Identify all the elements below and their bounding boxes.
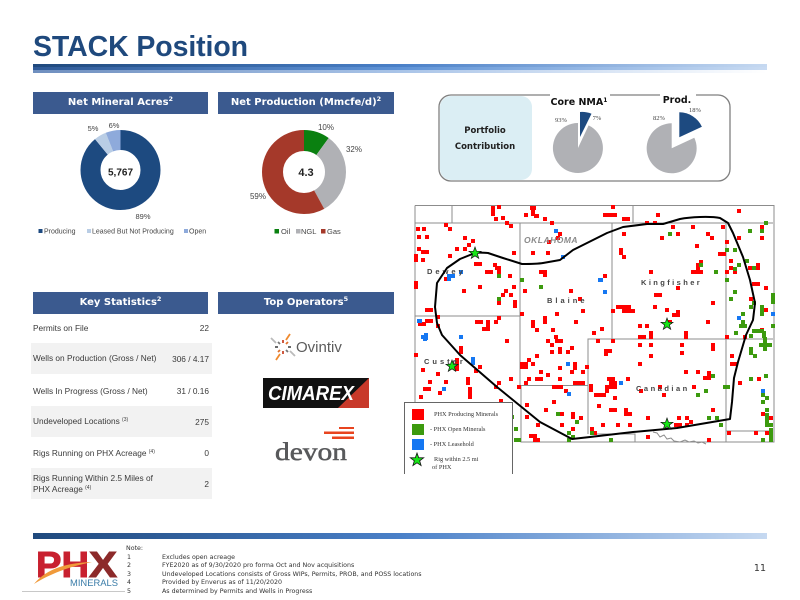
legend: net mineral acres: Open bbox=[189, 229, 206, 236]
page number: 11 bbox=[754, 563, 766, 574]
row: rigs within 2.5 miles: PHX Acreage (4) bbox=[33, 484, 91, 494]
map legend bbox=[404, 402, 513, 474]
map legend: - PHX Open Minerals bbox=[430, 426, 486, 433]
table: key statistics bbox=[31, 322, 212, 499]
map legend: of PHX bbox=[432, 464, 452, 471]
donut chart: net production: 59% bbox=[250, 192, 266, 201]
footnotes bbox=[126, 545, 422, 595]
row: permits on file bbox=[33, 322, 209, 333]
donut chart: net production: 4.3 bbox=[298, 167, 314, 179]
footnotes: 2 bbox=[127, 562, 131, 569]
footnotes: 3 bbox=[127, 571, 131, 578]
logo: Cimarex: CIMAREX bbox=[268, 383, 356, 405]
footnotes: 1 bbox=[127, 554, 131, 561]
row: wells in progress bbox=[33, 386, 209, 396]
county and state labels: OKLAHOMA bbox=[524, 235, 578, 245]
row: rigs within 2.5 miles bbox=[31, 468, 212, 499]
footnotes: Excludes open acreage bbox=[162, 554, 235, 561]
map bbox=[404, 205, 775, 474]
large red tract bbox=[520, 362, 528, 369]
legend: net mineral acres: Producing bbox=[44, 229, 76, 236]
panel: portfolio contribution: 1 bbox=[603, 97, 607, 104]
county and state labels bbox=[424, 235, 702, 393]
red producing mineral tracts bbox=[414, 206, 773, 440]
donut chart: net production bbox=[250, 123, 362, 214]
donut chart: net mineral acres: 5% bbox=[88, 124, 99, 133]
legend: net mineral acres: Leased But Not Producing bbox=[92, 229, 174, 236]
panel: portfolio contribution bbox=[438, 94, 731, 182]
heading: key statistics: Key Statistics2 bbox=[80, 295, 161, 308]
footnotes: Note: bbox=[126, 545, 143, 552]
legend: net production: Gas bbox=[327, 227, 341, 236]
county boundaries bbox=[415, 205, 774, 444]
row: undeveloped locations: Undeveloped Locations (3) bbox=[33, 416, 128, 426]
logo: PHX Minerals bbox=[22, 544, 125, 592]
donut chart: net mineral acres: 5,767 bbox=[108, 168, 133, 178]
row: undeveloped locations: 275 bbox=[195, 416, 209, 426]
map legend: PHX Producing Minerals bbox=[434, 411, 499, 418]
row: wells on production: 306 / 4.17 bbox=[172, 354, 209, 364]
panel: portfolio contribution: 18% bbox=[689, 107, 702, 114]
panel: portfolio contribution: Contribution bbox=[455, 142, 515, 152]
heading: top operators: Top Operators5 bbox=[264, 295, 348, 308]
heading: net production bbox=[218, 92, 394, 114]
logo: Devon: devon bbox=[275, 439, 348, 466]
green open mineral tracts bbox=[497, 223, 775, 442]
row: wells in progress: Wells In Progress (Gross / Net) bbox=[33, 386, 148, 396]
donut chart: net mineral acres: 89% bbox=[135, 212, 151, 221]
county and state labels: Canadian bbox=[636, 384, 690, 393]
title: STACK Position bbox=[33, 31, 248, 63]
logo: PHX Minerals: MINERALS bbox=[70, 578, 118, 588]
footnotes: Provided by Enverus as of 11/20/2020 bbox=[162, 579, 282, 586]
county and state labels: Kingfisher bbox=[641, 278, 702, 287]
blue leasehold tracts bbox=[417, 231, 775, 394]
heading: top operators bbox=[218, 292, 394, 314]
row: wells in progress: 31 / 0.16 bbox=[177, 386, 209, 396]
logo: Ovintiv: Ovintiv bbox=[296, 339, 342, 356]
STACK boundary outline bbox=[435, 217, 755, 439]
legend: net production: Oil bbox=[281, 227, 290, 236]
donut chart: net mineral acres bbox=[80, 121, 160, 221]
donut chart: net production: 10% bbox=[318, 123, 334, 132]
footnotes: Undeveloped Locations consists of Gross WIPs, Permits, PROB, and POSS locations bbox=[162, 571, 422, 578]
legend: net mineral acres bbox=[38, 228, 206, 236]
panel: portfolio contribution: Core NMA bbox=[551, 97, 603, 108]
map legend: - PHX Leasehold bbox=[430, 441, 475, 448]
row: wells on production bbox=[31, 343, 212, 374]
footer gradient bar bbox=[33, 533, 767, 539]
donut chart: net production: 32% bbox=[346, 145, 362, 154]
row: rigs within 2.5 miles: 2 bbox=[204, 478, 209, 488]
county and state labels: Dewey bbox=[427, 267, 466, 276]
panel: portfolio contribution: 93% bbox=[555, 117, 568, 124]
legend: net production: NGL bbox=[301, 227, 316, 236]
heading: net mineral acres bbox=[33, 92, 208, 114]
county and state labels: Custer bbox=[424, 357, 466, 366]
panel: portfolio contribution: Prod. bbox=[663, 95, 691, 106]
logo: PHX Minerals: X bbox=[89, 544, 117, 585]
heading: net mineral acres: Net Mineral Acres2 bbox=[68, 95, 173, 108]
panel: portfolio contribution: 82% bbox=[653, 115, 666, 122]
row: rigs within 2.5 miles: Rigs Running Within 2.5 Miles of bbox=[33, 472, 153, 482]
panel: portfolio contribution: Portfolio bbox=[464, 126, 506, 136]
logo: Devon bbox=[275, 427, 354, 466]
row: permits on file: 22 bbox=[200, 323, 209, 333]
row: wells on production: Wells on Production (Gross / Net) bbox=[33, 353, 156, 363]
rig star markers bbox=[446, 247, 673, 429]
legend: net production bbox=[274, 227, 341, 236]
row: rigs on PHX acreage bbox=[33, 448, 209, 458]
footnotes: 4 bbox=[127, 579, 131, 586]
logo: PHX Minerals: PH bbox=[36, 544, 89, 585]
heading: net production: Net Production (Mmcfe/d)2 bbox=[231, 95, 381, 108]
panel: portfolio contribution: 7% bbox=[593, 115, 602, 122]
heading: key statistics bbox=[33, 292, 208, 314]
row: undeveloped locations bbox=[31, 406, 212, 437]
footnotes: 5 bbox=[127, 588, 131, 595]
donut chart: net mineral acres: 6% bbox=[109, 121, 120, 130]
row: rigs on PHX acreage: 0 bbox=[204, 448, 209, 458]
footnotes: As determined by Permits and Wells in Progress bbox=[162, 588, 312, 595]
logo: Ovintiv bbox=[270, 334, 342, 360]
header gradient bar bbox=[33, 64, 767, 73]
row: rigs on PHX acreage: Rigs Running on PHX Acreage (4) bbox=[33, 448, 155, 458]
row: permits on file: Permits on File bbox=[33, 322, 88, 332]
map legend: Rig within 2.5 mi bbox=[434, 456, 479, 463]
county and state labels: Blaine bbox=[547, 296, 588, 305]
logo: Cimarex bbox=[263, 378, 369, 408]
footnotes: FYE2020 as of 9/30/2020 pro forma Oct and Nov acquisitions bbox=[162, 562, 354, 569]
